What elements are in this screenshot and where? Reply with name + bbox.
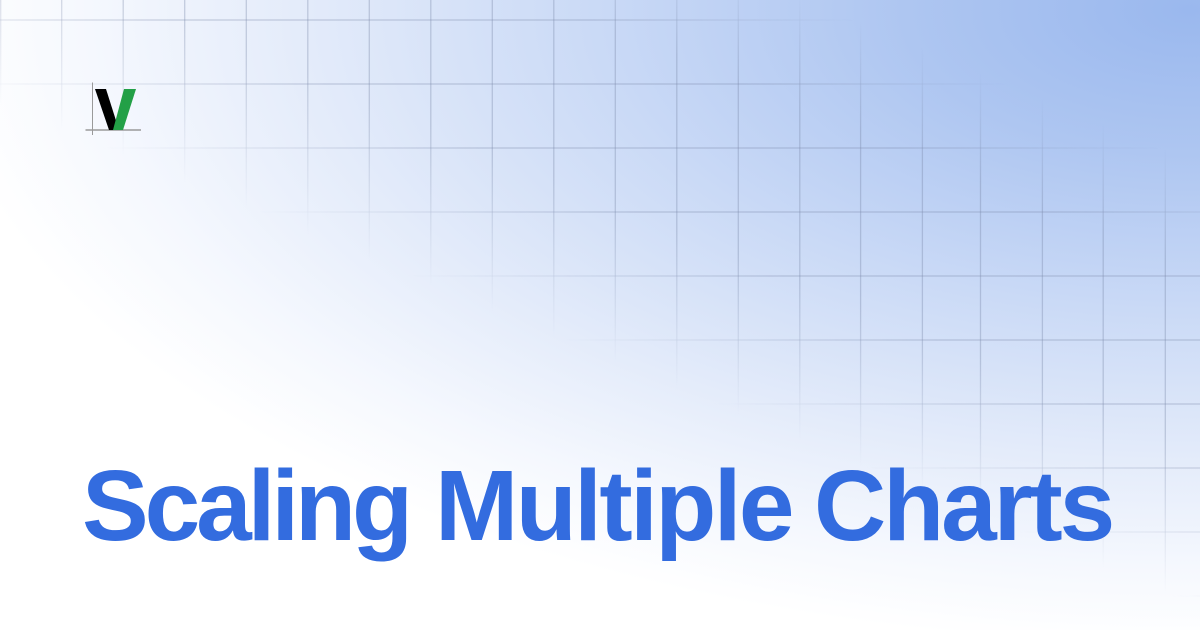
title bbox=[82, 450, 1112, 562]
title: Scaling bbox=[82, 450, 409, 562]
title: Charts bbox=[814, 450, 1112, 562]
logo green stroke bbox=[113, 89, 136, 130]
logo axis lines bbox=[86, 82, 141, 135]
title: Multiple bbox=[435, 450, 792, 562]
logo black stroke bbox=[95, 89, 119, 130]
logo: V mark on axes bbox=[86, 82, 141, 135]
